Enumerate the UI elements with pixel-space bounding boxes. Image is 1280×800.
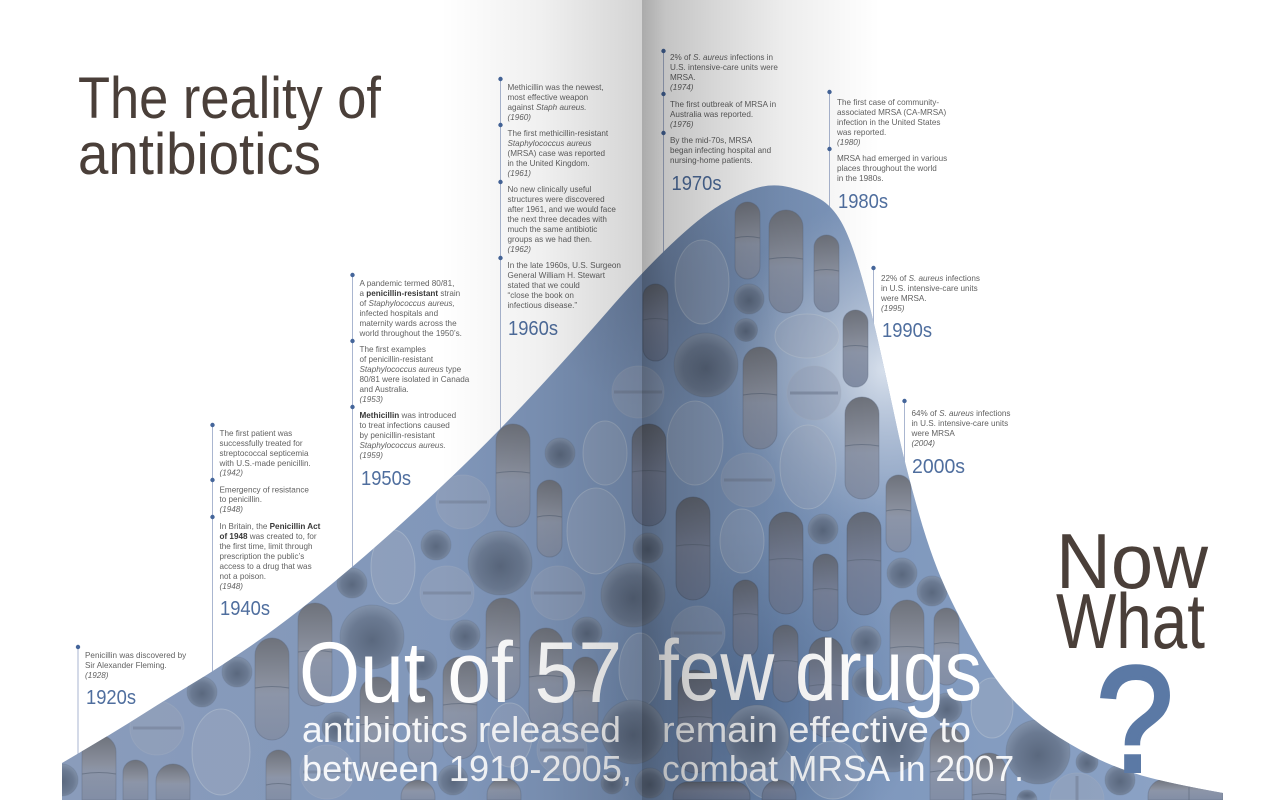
timeline: 1940s: Emergency of resistance <box>220 486 309 494</box>
timeline: 1960s: much the same antibiotic <box>508 225 597 234</box>
Now What heading: What <box>1056 577 1205 665</box>
timeline: 1940s: streptococcal septicemia <box>220 449 309 458</box>
headline: right: remain effective to <box>662 709 971 750</box>
timeline: 1960s: In the late 1960s, U.S. Surgeon <box>508 261 621 270</box>
timeline: 1990s: 22% of <box>881 274 909 283</box>
timeline: 1960s: Staphylococcus aureus <box>508 139 592 148</box>
timeline: 1980s: was reported. <box>836 128 886 137</box>
timeline: 1950s: infected hospitals and <box>360 309 438 318</box>
timeline: 1950s: world throughout the 1950’s. <box>358 329 462 338</box>
timeline: 1970s: By the mid-70s, MRSA <box>670 136 753 145</box>
timeline: 1940s: was created to, for <box>248 532 317 541</box>
timeline: 1940s: (1948) <box>220 505 243 514</box>
timeline: 1920s <box>76 645 187 757</box>
timeline: 1970s: MRSA. <box>670 73 696 82</box>
timeline: 1990s: in U.S. intensive-care units <box>881 284 978 293</box>
timeline: 1990s: 1990s <box>882 320 932 342</box>
timeline: 1940s: the first time, limit through <box>220 542 313 551</box>
timeline: 1960s: General William H. Stewart <box>508 271 606 280</box>
title: The reality of <box>78 66 382 131</box>
timeline: 1960s: “close the book on <box>508 291 574 300</box>
timeline: 1960s: against <box>508 103 536 112</box>
timeline: 1960s <box>498 77 621 432</box>
timeline: 1940s <box>210 423 321 675</box>
Now What heading <box>1056 517 1209 665</box>
timeline: 1940s: successfully treated for <box>220 439 303 448</box>
timeline: 1950s: penicillin-resistant strain <box>366 289 460 298</box>
timeline: 1950s: by penicillin-resistant <box>360 431 436 440</box>
timeline: 1960s: Methicillin was the newest, <box>508 83 604 92</box>
timeline: 1970s: (1974) <box>670 83 694 92</box>
timeline: 1960s: stated that we could <box>508 281 580 290</box>
timeline: 1980s: infection in the United States <box>837 118 940 127</box>
timeline: 1970s: 1970s <box>672 173 722 195</box>
timeline: 1940s: to penicillin. <box>220 495 262 504</box>
question mark: ? <box>1096 636 1173 800</box>
timeline: 1960s: (1962) <box>508 245 531 254</box>
timeline: 1970s: nursing-home patients. <box>670 156 753 165</box>
timeline: 1980s: (1980) <box>837 138 861 147</box>
timeline: 1950s <box>350 273 470 570</box>
timeline: 2000s: 2000s <box>912 456 965 478</box>
timeline: 1990s: (1995) <box>881 304 905 313</box>
timeline: 1970s: began infecting hospital and <box>670 146 771 155</box>
timeline: 2000s: were MRSA <box>910 429 955 438</box>
timeline: 1960s: structures were discovered <box>508 195 605 204</box>
timeline: 1960s: No new clinically useful <box>508 185 592 194</box>
timeline: 1960s: 1960s <box>508 318 558 340</box>
timeline: 1950s: Methicillin <box>360 411 399 420</box>
timeline: 1950s: a <box>360 289 366 298</box>
timeline: 1990s <box>871 266 980 345</box>
timeline: 2000s: (2004) <box>912 439 935 448</box>
timeline: 1940s: with U.S.-made penicillin. <box>218 459 311 468</box>
timeline: 1950s: 80/81 were isolated in Canada <box>360 375 470 384</box>
headline: left: antibiotics released <box>302 709 621 750</box>
timeline: 1980s <box>827 90 947 213</box>
timeline: 1950s: Staphylococcus aureus, <box>369 299 455 308</box>
timeline: 1940s: Penicillin Act <box>270 522 321 531</box>
timeline: 2000s: 64% of <box>912 409 939 418</box>
timeline: 2000s: S. aureus infections <box>939 409 1010 418</box>
capsules <box>82 202 1223 800</box>
timeline: 1940s: 1940s <box>220 598 270 620</box>
title: antibiotics <box>78 122 321 187</box>
timeline: 1950s: Staphylococcus aureus. <box>360 441 446 450</box>
timeline: 1980s: MRSA had emerged in various <box>837 154 947 163</box>
timeline: 1950s: type <box>444 365 462 374</box>
timeline: 1980s: associated MRSA (CA-MRSA) <box>837 108 947 117</box>
timeline: 1970s: U.S. intensive-care units were <box>670 63 778 72</box>
title <box>78 66 382 187</box>
timeline: 1950s: of <box>360 299 369 308</box>
timeline: 1980s: The first case of community- <box>837 98 939 107</box>
timeline: 1960s: Staph aureus. <box>536 103 587 112</box>
headline: right: few drugs <box>658 623 982 719</box>
timeline: 2000s <box>902 399 1010 478</box>
headline: right: combat MRSA in 2007. <box>662 748 1024 789</box>
tablets with score lines <box>130 366 1104 800</box>
spheres <box>46 284 1135 800</box>
timeline: 1980s: 1980s <box>838 191 888 213</box>
timeline: 1990s: were MRSA. <box>880 294 927 303</box>
timeline: 1960s: The first methicillin-resistant <box>508 129 609 138</box>
timeline: 1940s: prescription the public’s <box>220 552 304 561</box>
translucent ovals <box>192 240 1013 799</box>
timeline: 1980s: places throughout the world <box>837 164 937 173</box>
timeline: 1960s: in the United Kingdom. <box>508 159 590 168</box>
timeline: 1950s: to treat infections caused <box>360 421 450 430</box>
headline: left <box>299 625 632 789</box>
timeline: 1960s: (1960) <box>508 113 531 122</box>
timeline: 1950s: (1953) <box>360 395 383 404</box>
timeline: 1970s: 2% of <box>670 53 693 62</box>
timeline: 1960s: the next three decades with <box>508 215 607 224</box>
timeline: 1970s <box>661 49 778 254</box>
timeline: 1950s: Staphylococcus aureus <box>360 365 444 374</box>
timeline: 1940s: (1948) <box>220 582 243 591</box>
timeline: 1950s: and Australia. <box>360 385 409 394</box>
timeline: 1940s: (1942) <box>220 468 243 478</box>
timeline: 1940s: access to a drug that was <box>220 562 312 571</box>
timeline: 1950s: The first examples <box>360 345 426 354</box>
timeline: 1970s: The first outbreak of MRSA in <box>670 100 776 109</box>
timeline: 1920s: 1920s <box>86 687 136 709</box>
timeline: 1940s: not a poison. <box>220 572 266 581</box>
timeline: 1950s: of penicillin-resistant <box>360 355 434 364</box>
timeline: 1960s: (MRSA) case was reported <box>508 149 605 158</box>
timeline: 1960s: groups as we had then. <box>508 235 592 244</box>
timeline: 1920s: (1928) <box>85 671 109 680</box>
timeline: 2000s: in U.S. intensive-care units <box>912 419 1008 428</box>
chart: blue resistance curve filled with pills <box>46 180 1223 800</box>
timeline: 1940s: In Britain, the <box>220 522 270 531</box>
timeline: 1920s: Penicillin was discovered by <box>85 651 187 660</box>
book spine shadow <box>440 0 880 800</box>
timeline: 1990s: S. aureus infections <box>909 274 980 283</box>
timeline: 1970s: S. aureus infections in <box>693 53 773 62</box>
timeline: 1960s: after 1961, and we would face <box>508 205 616 214</box>
timeline: 1960s: (1961) <box>508 169 531 178</box>
timeline: 1920s: Sir Alexander Fleming. <box>85 661 167 670</box>
timeline: 1940s: of 1948 <box>220 532 248 541</box>
timeline: 1970s: Australia was reported. <box>670 110 753 119</box>
timeline: 1950s: (1959) <box>360 451 383 460</box>
headline: right <box>658 623 1024 789</box>
timeline: 1980s: in the 1980s. <box>837 174 884 183</box>
timeline: 1950s: was introduced <box>399 411 456 420</box>
timeline: 1940s: The first patient was <box>220 429 292 438</box>
timeline: 1960s: most effective weapon <box>508 93 588 102</box>
timeline: 1950s: 1950s <box>361 468 411 490</box>
timeline: 1970s: (1976) <box>670 120 694 129</box>
headline: left: between 1910-2005, <box>302 748 632 789</box>
headline: left: Out of 57 <box>299 625 622 721</box>
Now What heading: Now <box>1056 517 1209 605</box>
timeline: 1950s: maternity wards across the <box>360 319 457 328</box>
timeline: 1950s: A pandemic termed 80/81, <box>360 279 454 288</box>
timeline: 1960s: infectious disease.” <box>508 301 577 310</box>
